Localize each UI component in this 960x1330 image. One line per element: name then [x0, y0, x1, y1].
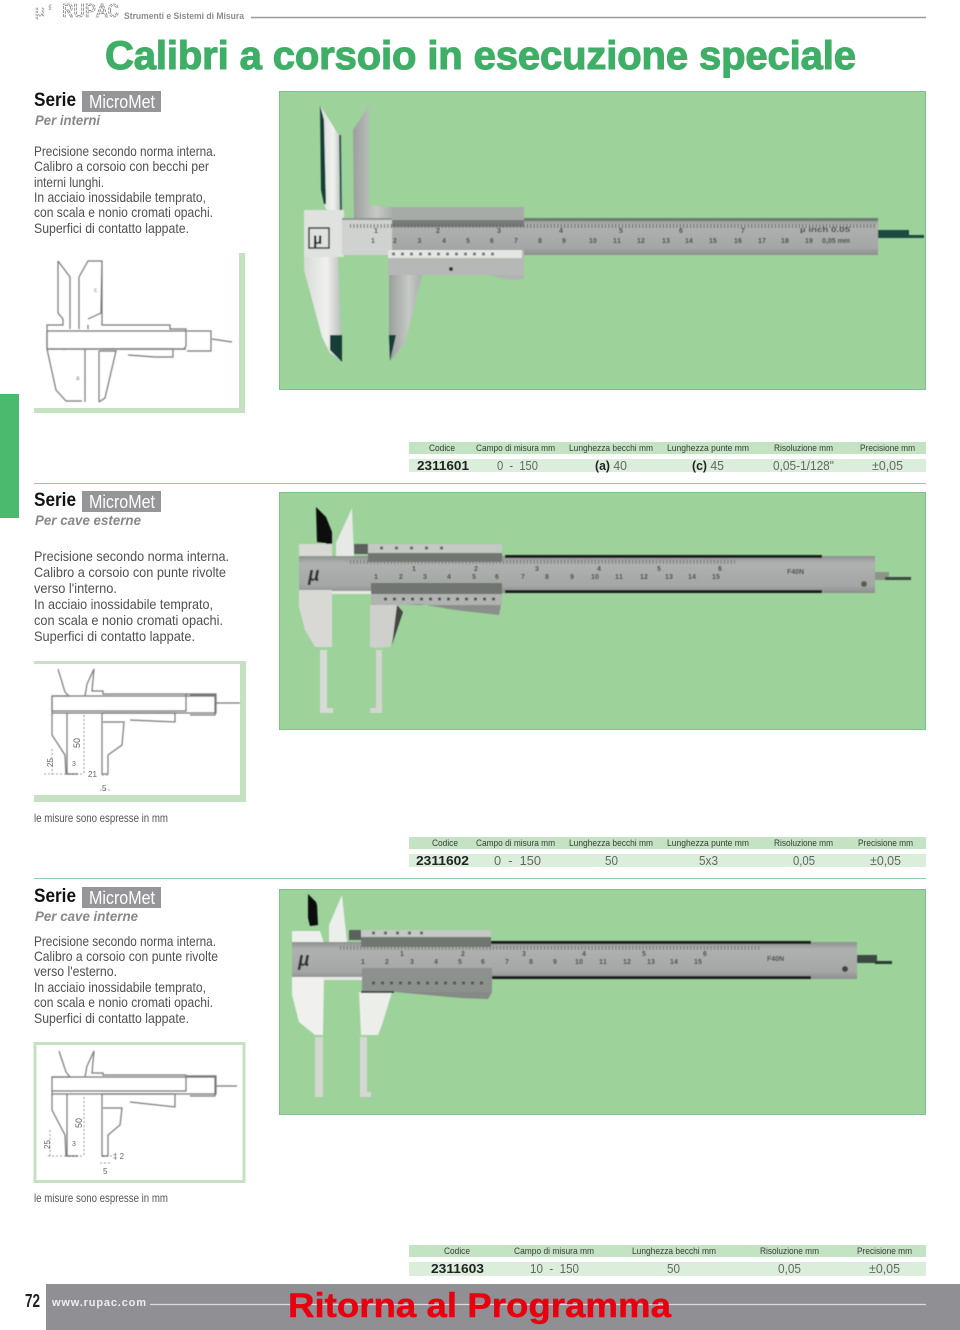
section 3 description: verso l'esterno. [34, 963, 117, 979]
caliper 1: 0,05 mm [822, 238, 850, 245]
table 1: ±0,05 [872, 459, 903, 473]
section 3 heading: Serie MicroMet, Per cave interne: Per cave interne [35, 908, 138, 924]
table 1: (c) 45 [692, 459, 724, 473]
section 2 heading: Serie MicroMet, Per cave esterne: Per cave esterne [35, 512, 141, 528]
table 1: (a) 40 [595, 459, 627, 473]
note: units: le misure sono espresse in mm [34, 811, 168, 825]
technical drawing 2: 25 [46, 758, 55, 767]
table 3: 0,05 [778, 1262, 801, 1276]
table 2: 0 - 150 [494, 854, 541, 868]
section 1 description: con scala e nonio cromati opachi. [34, 204, 213, 220]
table 1: Codice [429, 443, 455, 454]
section 3 heading: Serie MicroMet, Per cave interne: MicroMet [89, 888, 155, 908]
table 3: Campo di misura mm [514, 1246, 594, 1257]
table 2: Risoluzione mm [774, 838, 833, 849]
caliper 3: F40N [767, 956, 784, 963]
table 1: Lunghezza punte mm [667, 443, 749, 454]
table 2: Lunghezza punte mm [667, 838, 749, 849]
section 1 heading: Serie MicroMet, Per interni: Serie [34, 90, 76, 111]
caliper 1 [304, 105, 924, 362]
table 2: Precisione mm [858, 838, 913, 849]
caliper 2 [299, 507, 911, 713]
table 1: Lunghezza becchi mm [569, 443, 653, 454]
section 2 description: Superfici di contatto lappate. [34, 628, 195, 644]
table 1: 0 - 150 [497, 459, 538, 473]
footer bar [25, 1284, 960, 1330]
section 2 description: Calibro a corsoio con punte rivolte [34, 564, 226, 580]
table 2: Campo di misura mm [476, 838, 555, 849]
technical drawing 2: 50 [72, 738, 82, 748]
header: logo and tagline [35, 1, 926, 23]
caliper 3: 123456789101112131415 [361, 959, 702, 966]
section 1 description: Superfici di contatto lappate. [34, 220, 189, 236]
section 3 description: Superfici di contatto lappate. [34, 1010, 189, 1026]
technical drawing 2: 3 [72, 761, 76, 768]
section 3 description [34, 933, 218, 1026]
technical drawing 3: 5 [103, 1167, 108, 1176]
panel: caliper photo 2 [280, 492, 926, 730]
caliper 3 [292, 894, 892, 1097]
section 2 description [34, 548, 229, 644]
section 1 description: In acciaio inossidabile temprato, [34, 189, 206, 205]
table 3: 2311603 [431, 1261, 484, 1276]
table 2: ±0,05 [870, 854, 901, 868]
technical drawing 1: a [76, 376, 80, 382]
link: back to programme: Ritorna al Programma [288, 1287, 672, 1325]
table 3: Precisione mm [857, 1246, 912, 1257]
caliper 2: µ [307, 564, 320, 586]
section 3 description: In acciaio inossidabile temprato, [34, 979, 206, 995]
table 1: 2311601 [417, 458, 469, 473]
logo: Rupac: µ' [35, 4, 55, 21]
table 2: Lunghezza becchi mm [569, 838, 653, 849]
section 3 heading: Serie MicroMet, Per cave interne [34, 886, 161, 924]
caliper 3: 123456 [400, 951, 707, 958]
side tab [0, 394, 19, 518]
section 1 description: Precisione secondo norma interna. [34, 143, 216, 159]
caliper 2: F40N [787, 569, 804, 576]
section 2 heading: Serie MicroMet, Per cave esterne [34, 490, 161, 528]
table 3: 50 [667, 1262, 680, 1276]
technical drawing 2: 5 [102, 784, 107, 793]
section 1 description: interni lunghi. [34, 174, 104, 190]
table 2: 50 [605, 854, 618, 868]
section 2 description: Precisione secondo norma interna. [34, 548, 229, 564]
note: units: le misure sono espresse in mm [34, 1191, 168, 1205]
section 2 description: In acciaio inossidabile temprato, [34, 596, 213, 612]
table 2: 2311602 [416, 853, 469, 868]
section 1 heading: Serie MicroMet, Per interni: Per interni [35, 112, 101, 128]
section 3 description: con scala e nonio cromati opachi. [34, 994, 213, 1010]
caliper 1: 1234567 [374, 228, 745, 235]
technical drawing 3 [35, 1044, 244, 1182]
section 2 description: verso l'interno. [34, 580, 117, 596]
section 3 description: Calibro a corsoio con punte rivolte [34, 948, 218, 964]
section 2 description: con scala e nonio cromati opachi. [34, 612, 223, 628]
technical drawing 1: c [94, 288, 97, 294]
section 3 description: Precisione secondo norma interna. [34, 933, 216, 949]
table 3: Lunghezza becchi mm [632, 1246, 716, 1257]
logo: Rupac: RUPAC [62, 1, 119, 23]
table 1: Precisione mm [860, 443, 915, 454]
caliper 2: 123456789101112131415 [374, 574, 720, 581]
caliper 1: µ [313, 231, 322, 248]
technical drawing 3: 25 [43, 1140, 52, 1149]
table 3: Risoluzione mm [760, 1246, 819, 1257]
table 3 [409, 1245, 926, 1276]
table 3: 10 - 150 [530, 1262, 579, 1276]
table 2: Codice [432, 838, 458, 849]
section 3 heading: Serie MicroMet, Per cave interne: Serie [34, 886, 76, 907]
technical drawing 3: ‡ 2 [113, 1152, 125, 1161]
panel: caliper photo 1 [280, 92, 926, 390]
caliper 2: 123456 [412, 566, 722, 573]
table 1: Risoluzione mm [774, 443, 833, 454]
technical drawing 2: 21 [88, 770, 97, 779]
table 1: 0,05-1/128" [773, 459, 834, 473]
section 1 heading: Serie MicroMet, Per interni: MicroMet [89, 92, 155, 112]
section 1 description [34, 143, 216, 236]
technical drawing 3: 3 [72, 1141, 76, 1148]
logo: Rupac [35, 1, 119, 23]
panel: caliper photo 3 [280, 890, 926, 1114]
table 2: 5x3 [699, 854, 718, 868]
section 1 description: Calibro a corsoio con becchi per [34, 158, 209, 174]
technical drawing 2 [34, 661, 246, 802]
website: www.rupac.com [51, 1297, 146, 1309]
technical drawing 1 [34, 253, 245, 413]
caliper 3: µ [297, 949, 310, 971]
technical drawing 3: 50 [74, 1118, 84, 1128]
tagline: Strumenti e Sistemi di Misura [124, 11, 245, 21]
table 2: 0,05 [793, 854, 815, 868]
table 3: Codice [444, 1246, 470, 1257]
caliper 1: 12345678910111213141516171819 [371, 238, 813, 245]
caliper 1: µ inch 0.05 [800, 227, 850, 234]
section 2 heading: Serie MicroMet, Per cave esterne: MicroMet [89, 492, 155, 512]
table 3: ±0,05 [869, 1262, 900, 1276]
page number: 72 [25, 1291, 40, 1311]
title: Calibri a corsoio in esecuzione speciale [105, 34, 856, 78]
section 1 heading: Serie MicroMet, Per interni [34, 90, 161, 128]
table 2 [409, 837, 926, 868]
section 2 heading: Serie MicroMet, Per cave esterne: Serie [34, 490, 76, 511]
table 1 [409, 442, 926, 473]
table 1: Campo di misura mm [476, 443, 555, 454]
